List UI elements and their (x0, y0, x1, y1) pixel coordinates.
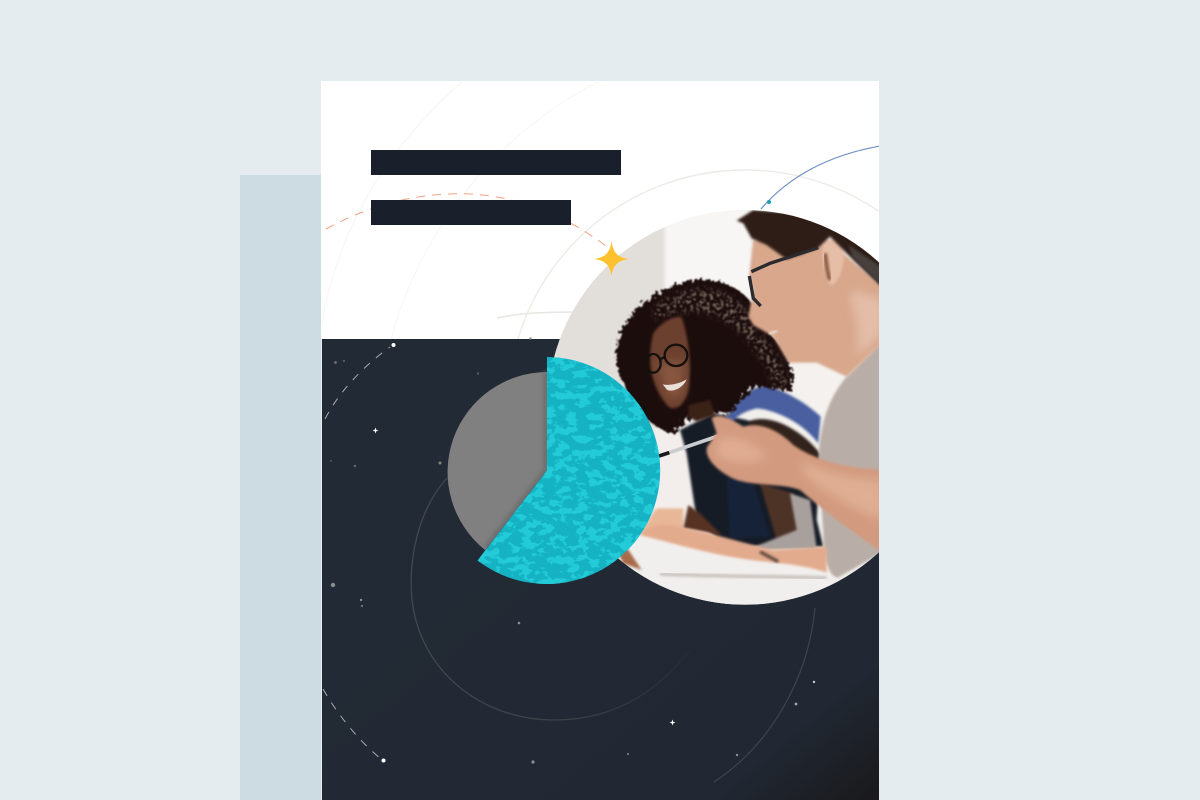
man mouth (769, 331, 777, 334)
woman smile (663, 379, 687, 391)
gold four-point star (594, 241, 629, 276)
wall (540, 200, 883, 610)
dark cover panel (322, 339, 879, 800)
woman neck (688, 400, 715, 422)
woman hair (616, 279, 792, 434)
title placeholder bar one (371, 150, 621, 175)
pen (669, 435, 720, 453)
man shirt (818, 340, 883, 578)
white dashed arc upper (325, 343, 396, 419)
white cover panel (321, 81, 879, 339)
table (640, 508, 683, 537)
woman hand (640, 525, 827, 573)
background side panel (240, 175, 321, 800)
blue orbit line with dot (761, 146, 880, 209)
orange dashed arc (326, 194, 606, 246)
star field (330, 337, 815, 764)
pie slice: grey remainder (448, 372, 547, 550)
pie chart (448, 357, 660, 584)
hair highlights (653, 289, 788, 387)
orbit lines (322, 81, 879, 782)
title placeholder bar two (371, 200, 571, 225)
woman clothing (680, 413, 823, 547)
pie shadow on grey (486, 372, 546, 548)
man ear (822, 239, 844, 285)
man hair (737, 210, 883, 288)
woman glasses (646, 345, 687, 373)
woman arm (748, 417, 820, 458)
man arm and hand (707, 416, 883, 553)
paper (630, 568, 838, 605)
woman face (650, 317, 690, 408)
blue shawl (725, 385, 821, 443)
photo: two students (540, 200, 883, 610)
pie slice: teal majority (478, 357, 660, 584)
man glasses (749, 248, 818, 306)
white dashed arc lower (323, 689, 386, 762)
report cover illustration (240, 81, 879, 800)
man head (748, 240, 883, 377)
